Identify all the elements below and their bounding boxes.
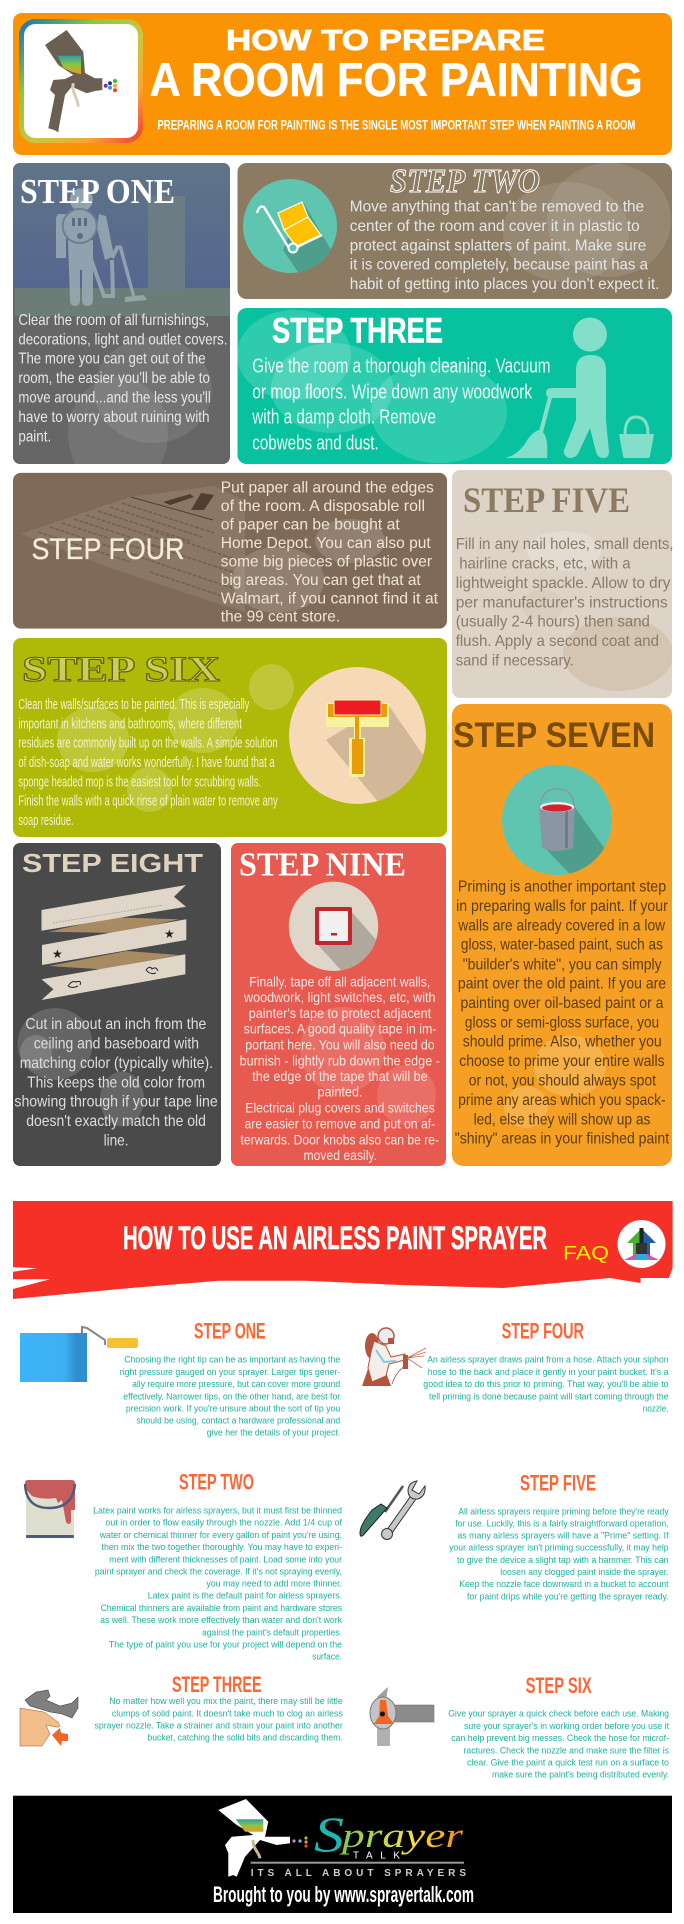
- text: faq step two body: paint sprayer and check the coverage. If it's not spraying evenly,: [95, 1566, 342, 1577]
- text: faq step one body: precision work. If you're unsure about the sort of tip you: [126, 1403, 340, 1414]
- text: faq step six body: clear. Give the paint a quick test run on a surface to: [467, 1757, 669, 1768]
- text: faq step six body: ractures. Check the nozzle and make sure the filter is: [464, 1745, 669, 1756]
- text: step nine body: painted.: [318, 1085, 362, 1100]
- FAQ label: FAQ: [563, 1243, 609, 1264]
- panel: step eight: [13, 843, 221, 1166]
- icon: hand on spray trigger: [20, 1690, 78, 1746]
- text: step four body: Home Depot. You can also put: [221, 535, 431, 552]
- FAQ step one: [20, 1319, 341, 1439]
- heading: faq step four: STEP FOUR: [502, 1318, 584, 1344]
- heading: step six: STEP SIX: [22, 649, 220, 689]
- FAQ step five: [360, 1470, 669, 1602]
- logo wordmark: Sprayer: prayer: [338, 1816, 463, 1855]
- text: step six body: residues are commonly built up on the walls. A simple solution: [18, 735, 278, 752]
- text: faq step three body: [94, 1696, 344, 1744]
- icon: blue paint roller: [20, 1327, 138, 1382]
- text: step nine body: surfaces. A good quality tape in im-: [244, 1022, 436, 1037]
- text: step seven body: "builder's white", you can simply: [463, 956, 662, 973]
- text: step nine body: terwards. Door knobs also can be re-: [240, 1132, 439, 1147]
- text: step two body: habit of getting into places you don't expect it.: [350, 276, 659, 293]
- text: faq step two body: surface.: [312, 1652, 342, 1663]
- footer: [13, 1796, 672, 1913]
- text: faq step five body: loosen any clogged paint inside the sprayer.: [500, 1567, 669, 1578]
- text: step nine body: painter's tape to protect adjacent: [249, 1006, 431, 1021]
- text: step six body: of dish-soap and water works wonderfully. I have found that a: [18, 754, 275, 771]
- heading: step eight: STEP EIGHT: [22, 848, 203, 878]
- text: faq step two body: as well. These work more effectively than water and don't work: [100, 1615, 342, 1626]
- text: step one body: The more you can get out of the: [18, 351, 206, 368]
- text: faq step one body: Choosing the right tip can be as important as having the: [124, 1355, 340, 1366]
- text: step six body: important in kitchens and bathrooms, where different: [18, 715, 242, 732]
- text: step one body: decorations, light and outlet covers.: [18, 331, 227, 348]
- text: step two body: it is covered completely, because paint has a: [350, 257, 648, 274]
- FAQ step four: [362, 1318, 669, 1414]
- heading: step three: STEP THREE: [272, 312, 443, 350]
- text: step five body: sand if necessary.: [456, 652, 574, 669]
- text: step two body: protect against splatters of paint. Make sure: [350, 237, 646, 254]
- text: faq step one body: right pressure gauged on your sprayer. Larger tips gener-: [120, 1367, 340, 1378]
- text: step four body: of the room. A disposable roll: [221, 498, 425, 515]
- heading: faq step five: STEP FIVE: [520, 1470, 596, 1495]
- icon: person with vacuum: [56, 188, 147, 306]
- text: step four body: the 99 cent store.: [221, 609, 340, 626]
- text: faq step five body: to give the device a slight tap with a hammer. This can: [457, 1555, 669, 1566]
- text: faq step four body: nozzle.: [643, 1403, 669, 1414]
- text: faq step two body: out in order to flow easily through the nozzle. Add 1/4 cup of: [105, 1518, 342, 1529]
- text: step four body: [221, 480, 439, 626]
- icon: man with spray gun: [362, 1328, 426, 1386]
- text: step two body: [350, 199, 659, 293]
- panel: step one: [13, 163, 230, 491]
- text: step five body: flush. Apply a second coat and: [456, 633, 659, 650]
- icon: screwdriver and wrench: [360, 1481, 425, 1540]
- text: faq step two body: Latex paint is the default paint for airless sprayers.: [148, 1591, 342, 1602]
- text: faq step two body: [93, 1506, 343, 1663]
- icon: paint roller: [289, 667, 430, 810]
- text: step eight body: matching color (typically white).: [20, 1055, 213, 1072]
- logo tagline: ITS ALL ABOUT SPRAYERS: [251, 1868, 466, 1879]
- text: step nine body: woodwork, light switches, etc, with: [243, 990, 436, 1005]
- panel: step two: [238, 163, 672, 299]
- icon: folded ribbon banner: [42, 885, 186, 1000]
- text: faq step one body: effectively. Narrower tips, on the other hand, are best for: [123, 1391, 341, 1402]
- text: step six body: Finish the walls with a quick rinse of plain water to remove any: [18, 793, 278, 810]
- text: step four body: some big pieces of plastic over: [221, 554, 432, 571]
- logo: TALK: TALK: [353, 1850, 400, 1861]
- text: step five body: (usually 2-4 hours) then sand: [456, 614, 650, 631]
- text: step five body: [456, 536, 674, 669]
- text: step eight body: doesn't exactly match the old: [26, 1113, 206, 1130]
- banner: airless paint sprayer: [13, 1201, 673, 1299]
- FAQ step two: [25, 1470, 343, 1663]
- text: faq step six body: sure your sprayer's in working order before you use it: [464, 1721, 669, 1732]
- text: faq step two body: Chemical thinners are available from paint and hardware stores: [101, 1603, 342, 1614]
- text: faq step four body: [423, 1355, 669, 1414]
- text: step nine body: the edge of the tape that will be: [252, 1069, 428, 1084]
- text: step four body: Walmart, if you cannot find it at: [221, 590, 439, 607]
- text: faq step one body: give her the details of your project.: [207, 1428, 340, 1439]
- text: faq step two body: water or chemical thinner for every gallon of paint you're using,: [99, 1530, 342, 1541]
- text: step two body: Move anything that can't be removed to the: [350, 199, 644, 216]
- text: faq step four body: good idea to do this prior to priming. That way, you'll be able to: [423, 1379, 669, 1390]
- text: faq step five body: as many airless sprayers will have a "Prime" setting. If: [457, 1531, 669, 1542]
- text: step two body: center of the room and cover it in plastic to: [350, 218, 640, 235]
- text: step nine body: burnish - lightly rub down the edge -: [240, 1053, 440, 1068]
- icon: spray tip: [370, 1687, 434, 1746]
- heading: step nine: STEP NINE: [239, 846, 406, 884]
- text: step nine body: [240, 974, 440, 1163]
- text: step six body: soap residue.: [18, 812, 73, 829]
- title line 2: A ROOM FOR PAINTING: [150, 54, 643, 107]
- FAQ step three: [20, 1672, 344, 1746]
- text: step seven body: [455, 879, 670, 1148]
- text: step eight body: [14, 1016, 218, 1149]
- heading: faq step six: STEP SIX: [526, 1673, 592, 1698]
- text: step one body: paint.: [18, 428, 51, 445]
- text: step six body: [18, 696, 278, 829]
- text: step one body: room, the easier you'll be able to: [18, 370, 210, 387]
- text: faq step two body: ment with different thicknesses of paint. Load some into your: [109, 1554, 343, 1565]
- FAQ step six: [370, 1673, 669, 1781]
- icon: paint can: [502, 765, 612, 875]
- text: step eight body: showing through if your tape line: [14, 1094, 218, 1111]
- text: faq step three body: sprayer nozzle. Take a strainer and strain your paint into another: [94, 1721, 344, 1732]
- text: step nine body: portant here. You will also need do: [245, 1038, 435, 1053]
- icon: hand cart: [243, 179, 337, 273]
- text: faq step one body: ally require more pressure, but can cover more ground: [132, 1379, 340, 1390]
- text: step five body: lightweight spackle. Allow to dry: [456, 575, 670, 592]
- image: faded newspaper: [21, 486, 245, 612]
- text: step nine body: Electrical plug covers and switches: [245, 1101, 435, 1116]
- panel: step five: [452, 470, 674, 698]
- logo wordmark: Sprayer: S: [314, 1806, 344, 1862]
- text: step four body: big areas. You can get that at: [221, 572, 421, 589]
- text: faq step five body: for paint drips while you're getting the sprayer ready.: [467, 1591, 669, 1602]
- text: step three body: with a damp cloth. Remove: [252, 407, 436, 429]
- text: step three body: [252, 355, 550, 455]
- text: step seven body: led, else they will show up as: [474, 1111, 650, 1128]
- text: faq step four body: hose to the back and place it gently in your paint bucket. It's a: [428, 1367, 669, 1378]
- text: step seven body: should prime. Also, whether you: [463, 1034, 662, 1051]
- heading: step four: STEP FOUR: [32, 533, 184, 566]
- text: faq step two body: against the paint's default properties.: [202, 1627, 342, 1638]
- icon: light switch: [288, 882, 378, 971]
- icon: folded ribbon banner: ★: [52, 947, 63, 961]
- icon: paint bucket: [25, 1480, 75, 1538]
- text: step one body: have to worry about ruining with: [18, 409, 210, 426]
- text: step four body: Put paper all around the edges: [221, 480, 434, 497]
- panel: step four: [13, 473, 447, 629]
- text: step eight body: This keeps the old color from: [27, 1074, 205, 1091]
- logo wordmark: Sprayer: [314, 1806, 463, 1862]
- text: faq step two body: Latex paint works for airless sprayers, but it must first be thinned: [93, 1506, 342, 1517]
- text: faq step three body: bucket, catching the solid bits and discarding them.: [147, 1733, 343, 1744]
- text: step eight body: line.: [104, 1132, 128, 1149]
- heading: step two: STEP TWO: [390, 163, 540, 200]
- text: step five body: per manufacturer's instructions: [456, 594, 668, 611]
- text: step one body: Clear the room of all furnishings,: [18, 312, 209, 329]
- text: faq step three body: No matter how well you mix the paint, there may still be little: [109, 1696, 343, 1707]
- text: step nine body: moved easily.: [304, 1148, 377, 1163]
- title line 1: HOW TO PREPARE: [226, 25, 545, 57]
- text: step three body: or mop floors. Wipe down any woodwork: [252, 381, 533, 403]
- panel: step three: [237, 308, 672, 464]
- icon: folded ribbon banner: ★: [164, 927, 175, 941]
- icon: spray gun logo: [22, 22, 140, 140]
- text: faq step one body: [120, 1355, 341, 1439]
- heading: step seven: STEP SEVEN: [453, 716, 655, 755]
- footer credit: Brought to you by www.sprayertalk.com: [213, 1882, 474, 1907]
- text: step six body: Clean the walls/surfaces to be painted. This is especially: [18, 696, 250, 713]
- heading: faq step one: STEP ONE: [194, 1319, 266, 1344]
- heading: faq step three: STEP THREE: [172, 1672, 262, 1697]
- text: faq step six body: [448, 1709, 669, 1781]
- text: step eight body: ceiling and baseboard with: [34, 1035, 199, 1052]
- heading: step five: STEP FIVE: [463, 480, 630, 520]
- text: step four body: of paper can be bought at: [221, 516, 400, 533]
- header banner: [13, 13, 672, 155]
- text: step three body: cobwebs and dust.: [252, 433, 379, 455]
- text: step five body: Fill in any nail holes, small dents,: [456, 536, 674, 553]
- text: step one body: [18, 312, 227, 445]
- text: step nine body: Finally, tape off all adjacent walls,: [249, 974, 430, 989]
- panel: step six: [13, 638, 447, 837]
- text: step seven body: or not, you should always spot: [469, 1073, 656, 1090]
- heading: faq step two: STEP TWO: [179, 1470, 254, 1495]
- text: step eight body: Cut in about an inch from the: [25, 1016, 206, 1033]
- text: faq step one body: should be using, contact a hardware professional and: [136, 1415, 340, 1426]
- text: step one body: move around...and the less you'll: [18, 389, 211, 406]
- text: faq step two body: you may need to add more thinner.: [206, 1579, 342, 1590]
- icon: person mopping: [505, 318, 654, 458]
- text: faq step six body: make sure the paint's being distributed evenly.: [492, 1770, 669, 1781]
- text: faq step two body: then mix the two together thoroughly. You may have to experi-: [102, 1542, 342, 1553]
- text: faq step three body: clumps of solid paint. It doesn't take much to clog an airless: [112, 1708, 343, 1719]
- text: step three body: Give the room a thorough cleaning. Vacuum: [252, 355, 551, 377]
- icon: white spray gun logo: [218, 1799, 308, 1877]
- text: step five body: hairline cracks, etc, with a: [459, 555, 631, 572]
- text: step six body: sponge headed mop is the easiest tool for scrubbing walls.: [18, 773, 261, 790]
- text: faq step five body: for use. Luckily, this is a fairly straightforward operation,: [455, 1518, 669, 1529]
- heading: step one: STEP ONE: [20, 172, 175, 211]
- panel: step seven: [452, 704, 672, 1166]
- text: faq step five body: [449, 1506, 669, 1602]
- icon: house and brush badge: [618, 1220, 666, 1268]
- text: step nine body: are easier to remove and put on af-: [244, 1116, 435, 1131]
- text: faq step two body: The type of paint you use for your project will depend on the: [109, 1639, 342, 1650]
- panel: step nine: [231, 843, 446, 1166]
